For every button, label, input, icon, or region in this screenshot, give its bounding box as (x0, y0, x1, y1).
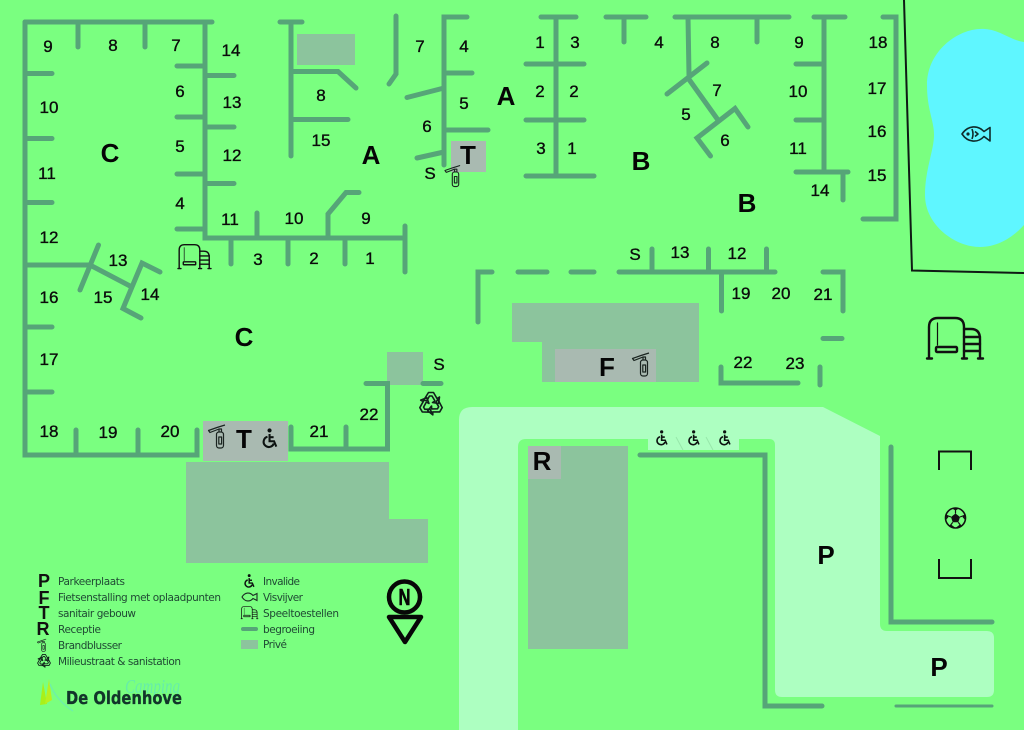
road and parking area (459, 407, 994, 730)
pitch numbers: field A: 6 (422, 117, 432, 136)
field letters: T (236, 424, 252, 454)
bike storage grey (555, 349, 656, 382)
pitch numbers: field A: 8 (316, 86, 326, 105)
legend: right column: Invalide (263, 576, 300, 588)
hedges: field C (25, 22, 405, 455)
pitch numbers: field A: 1 (567, 139, 577, 158)
pitch numbers: field C: 12 (223, 146, 241, 165)
legend: right column: begroeiing (263, 624, 315, 636)
pitch numbers: field A: 15 (312, 131, 330, 150)
field letters: A (362, 140, 381, 170)
pitch numbers: field C: 17 (40, 350, 58, 369)
pitch with goals (939, 452, 971, 578)
pitch numbers: field C: 14 (141, 285, 159, 304)
pitch numbers: field B: 18 (869, 33, 887, 52)
legend: left column: Brandblusser (58, 640, 123, 652)
legend swatch: hedge (243, 627, 256, 631)
north arrow: N (398, 584, 410, 610)
logo (40, 676, 182, 711)
private area: small block (387, 352, 423, 385)
legend: right column (263, 576, 339, 651)
pitch numbers: field C: 5 (175, 137, 185, 156)
pitch numbers: field C: 8 (108, 36, 118, 55)
hedges: parking and sports field (640, 447, 992, 706)
private area: south-west (186, 462, 428, 563)
icon: accessible parking 1 (657, 430, 667, 445)
icon: football (946, 508, 966, 528)
pitch numbers: field A: 3 (536, 139, 546, 158)
pitch numbers: field A: 2 (535, 82, 545, 101)
hedges: field A (280, 16, 594, 449)
reception grey (528, 446, 561, 479)
pitch numbers: south-centre (671, 243, 832, 373)
field letters: C (235, 322, 254, 352)
pitch numbers: field C: 18 (40, 422, 58, 441)
hedges: field south-centre (478, 249, 843, 385)
pitch numbers: field C: 13 (223, 93, 241, 112)
legend: left column: R (36, 619, 50, 639)
legend swatch: private (241, 640, 258, 649)
pitch numbers: field C: 2 (309, 249, 319, 268)
icon: extinguisher at bike storage (632, 353, 649, 376)
legend: left column: Fietsenstalling met oplaadpunten (58, 592, 221, 604)
logo: De Oldenhove (66, 688, 182, 709)
pitch numbers: field C: 10 (285, 209, 303, 228)
pitch numbers: field B: 14 (811, 181, 829, 200)
pitch numbers: field C: 13 (109, 251, 127, 270)
north arrow (389, 582, 421, 642)
pitch numbers: field A: 3 (570, 33, 580, 52)
pitch numbers: field C: 14 (222, 41, 240, 60)
icon: recycling station (417, 392, 445, 417)
pitch numbers: field C: 21 (310, 422, 328, 441)
legend: left column: F (38, 588, 50, 608)
pitch numbers: field B: 7 (712, 81, 722, 100)
hedges: field B (606, 17, 896, 219)
field letters: B (738, 188, 756, 218)
icon: small playground (178, 245, 211, 269)
legend icon: wheelchair (245, 574, 254, 587)
pitch numbers: field C: 22 (360, 405, 378, 424)
legend: left column: Parkeerplaats (58, 576, 125, 588)
pitch numbers: field C: 12 (40, 228, 58, 247)
pitch numbers: field C: 9 (43, 37, 53, 56)
private area: bike storage (512, 303, 699, 382)
icon: large playground (927, 318, 983, 358)
service markers S: S (424, 164, 436, 183)
pitch numbers: field C: 15 (94, 288, 112, 307)
pitch numbers: field A: 7 (415, 37, 425, 56)
legend: right column: Privé (263, 639, 287, 651)
pitch numbers: field B: 10 (789, 82, 807, 101)
logo: Camping (125, 676, 180, 698)
pitch numbers: field A: 5 (459, 94, 469, 113)
pitch numbers: south-centre: 22 (734, 353, 752, 372)
legend icon: playground (241, 606, 258, 619)
pitch numbers: field A (312, 33, 580, 158)
legend: right column: Speeltoestellen (263, 608, 339, 620)
legend: left column: Milieustraat & sanistation (58, 656, 181, 668)
legend icon: extinguisher (37, 639, 46, 651)
field letters (101, 81, 948, 682)
accessible parking strip (648, 437, 739, 450)
pitch numbers: south-centre: 19 (732, 284, 750, 303)
pitch numbers: field A: 2 (569, 82, 579, 101)
service markers S: S (433, 355, 445, 374)
field letters: B (632, 146, 650, 176)
field letters: R (533, 446, 552, 476)
pitch numbers: field B: 5 (681, 105, 691, 124)
pitch numbers: field C: 6 (175, 82, 185, 101)
pond (925, 29, 1024, 247)
pitch numbers: field B: 4 (654, 33, 664, 52)
sanitary block south grey (203, 421, 288, 461)
field letters: C (101, 138, 120, 168)
pitch numbers: south-centre: 13 (671, 243, 689, 262)
field letters: T (460, 140, 476, 170)
pitch numbers: field C: 16 (40, 288, 58, 307)
icon: accessible parking 2 (689, 430, 699, 445)
pitch numbers: field C: 3 (253, 250, 263, 269)
icon: wheelchair at south sanitary block (264, 428, 276, 447)
legend: left column: sanitair gebouw (58, 608, 136, 620)
pitch numbers: field B (654, 33, 887, 200)
pitch numbers: field C (38, 36, 378, 442)
pitch numbers: field C: 4 (175, 194, 185, 213)
pitch numbers: field B: 9 (794, 33, 804, 52)
pitch numbers: field C: 9 (361, 209, 371, 228)
field letters: P (930, 652, 948, 682)
pitch numbers: field C: 10 (40, 98, 58, 117)
field letters: A (497, 81, 516, 111)
pitch numbers: field C: 7 (171, 36, 181, 55)
pitch numbers: field C: 19 (99, 423, 117, 442)
pitch numbers: field A: 1 (535, 33, 545, 52)
icon: extinguisher at south sanitary block (208, 425, 225, 448)
private area: north (297, 34, 355, 65)
field letters: F (599, 352, 615, 382)
pitch numbers: south-centre: 20 (772, 284, 790, 303)
pitch numbers: field C: 20 (161, 422, 179, 441)
pitch numbers: field B: 11 (789, 139, 807, 158)
pitch numbers: south-centre: 12 (728, 244, 746, 263)
site boundary (904, 0, 1024, 273)
sanitary block grey (451, 141, 486, 172)
legend: left column: Receptie (58, 624, 101, 636)
legend icon: fish (242, 593, 257, 601)
legend: left column: T (38, 603, 50, 623)
pitch numbers: field B: 15 (868, 166, 886, 185)
pitch numbers: south-centre: 21 (814, 285, 832, 304)
icon: extinguisher at north sanitary block (445, 166, 460, 187)
legend: left column (36, 571, 221, 668)
legend: left column: P (38, 571, 50, 591)
icon: accessible parking 3 (720, 430, 730, 445)
service markers S: S (629, 245, 641, 264)
pitch numbers: field C: 11 (38, 164, 56, 183)
pitch numbers: field B: 17 (868, 79, 886, 98)
field letters: P (817, 540, 835, 570)
pitch numbers: field C: 11 (221, 210, 239, 229)
legend: right column: Visvijver (263, 592, 304, 604)
pitch numbers: field B: 16 (868, 122, 886, 141)
pitch numbers: field C: 1 (365, 249, 375, 268)
pitch numbers: field B: 6 (720, 131, 730, 150)
service markers S (424, 164, 641, 374)
pitch numbers: field B: 8 (710, 33, 720, 52)
private area: reception (528, 446, 628, 649)
icon: fish in pond (962, 127, 990, 141)
pitch numbers: south-centre: 23 (786, 354, 804, 373)
pitch numbers: field A: 4 (459, 37, 469, 56)
legend icon: recycling (36, 654, 52, 668)
